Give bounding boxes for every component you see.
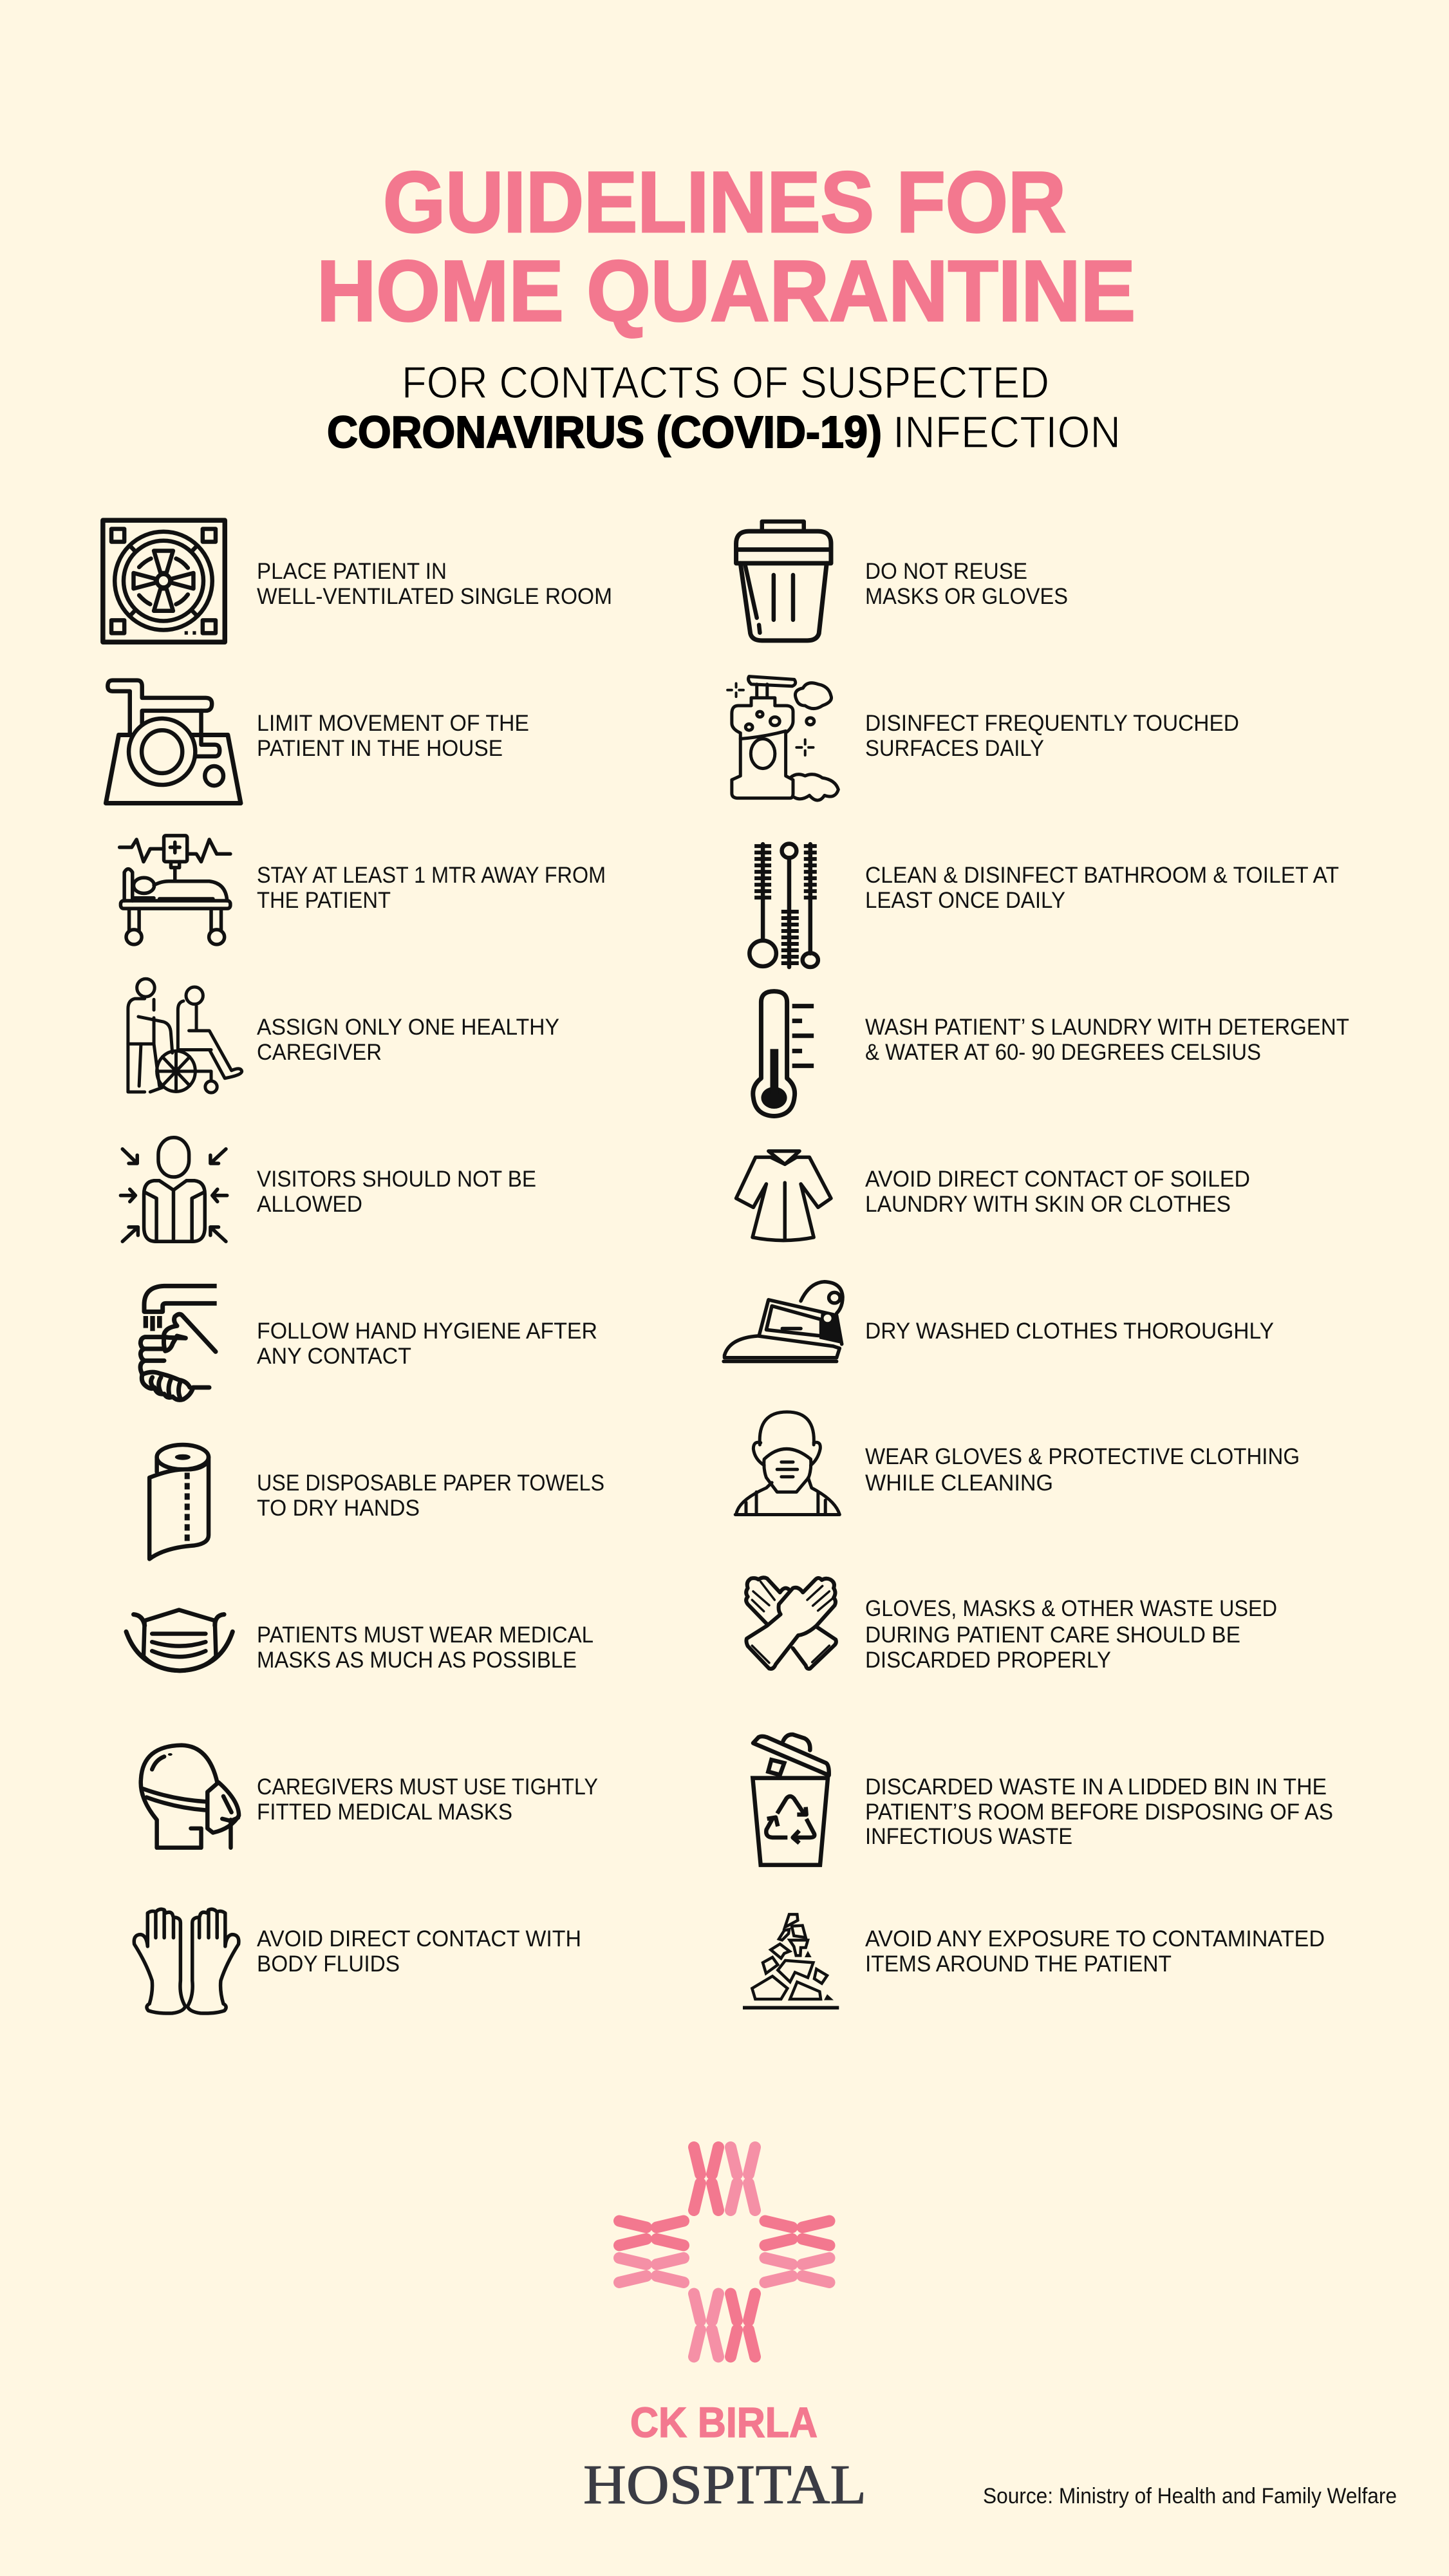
text: no visitors: ALLOWED — [257, 1192, 362, 1217]
text: one caregiver — [257, 1015, 559, 1065]
icon: head with fitted mask — [141, 1745, 239, 1848]
text: hand hygiene — [257, 1319, 597, 1369]
text: limit movement — [257, 711, 529, 761]
title: HOME QUARANTINE — [317, 243, 1136, 339]
text: lidded bin: PATIENT’S ROOM BEFORE DISPOSING OF AS — [865, 1800, 1333, 1825]
text: one caregiver: CAREGIVER — [257, 1040, 382, 1065]
icon: hand washing tap — [140, 1286, 217, 1400]
icon: paper towel roll — [149, 1445, 209, 1559]
text: lidded bin: INFECTIOUS WASTE — [865, 1824, 1072, 1849]
text: no visitors — [257, 1167, 536, 1217]
subtitle — [327, 357, 1121, 457]
icon: lidded recycling bin — [753, 1735, 829, 1865]
text: hand hygiene: FOLLOW HAND HYGIENE AFTER — [257, 1319, 597, 1344]
text: waste discarded — [865, 1596, 1277, 1673]
icon: person with mask — [735, 1412, 839, 1514]
text: paper towels: USE DISPOSABLE PAPER TOWELS — [257, 1471, 604, 1496]
text: protective clothing: WHILE CLEANING — [865, 1471, 1053, 1496]
logo: chromosome cross — [619, 2147, 829, 2356]
text: do not reuse: DO NOT REUSE — [865, 559, 1027, 584]
text: limit movement: PATIENT IN THE HOUSE — [257, 736, 503, 761]
logo text: CK Birla: CK BIRLA — [630, 2398, 818, 2446]
text: stay away: STAY AT LEAST 1 MTR AWAY FROM — [257, 863, 606, 888]
text: wash laundry — [865, 1015, 1349, 1065]
text: disinfect surfaces: SURFACES DAILY — [865, 736, 1044, 761]
text: clean bathroom: LEAST ONCE DAILY — [865, 888, 1065, 913]
text: waste discarded: DISCARDED PROPERLY — [865, 1648, 1111, 1673]
text: place patient: PLACE PATIENT IN — [257, 559, 447, 584]
text: caregiver masks: CAREGIVERS MUST USE TIGHTLY — [257, 1774, 598, 1800]
text: paper towels: TO DRY HANDS — [257, 1496, 420, 1521]
text: caregiver masks — [257, 1774, 598, 1825]
text: stay away — [257, 863, 606, 913]
text: body fluids — [257, 1926, 581, 1977]
text: paper towels — [257, 1471, 604, 1521]
text: soiled laundry: AVOID DIRECT CONTACT OF SOILED — [865, 1167, 1250, 1192]
text: body fluids: BODY FLUIDS — [257, 1951, 400, 1977]
text: body fluids: AVOID DIRECT CONTACT WITH — [257, 1926, 581, 1951]
text: place patient — [257, 559, 612, 609]
icon: pair of gloves — [134, 1909, 239, 2013]
text: contaminated items — [865, 1926, 1325, 1977]
text: no visitors: VISITORS SHOULD NOT BE — [257, 1167, 536, 1192]
panel: right column guidelines — [724, 522, 1349, 2007]
icon: crossed gloves — [746, 1577, 836, 1669]
icon: ventilation fan — [103, 520, 225, 642]
text: dry clothes: DRY WASHED CLOTHES THOROUGHLY — [865, 1319, 1274, 1344]
text: waste discarded: DURING PATIENT CARE SHOULD BE — [865, 1622, 1240, 1648]
text: do not reuse: MASKS OR GLOVES — [865, 584, 1068, 609]
title: GUIDELINES FOR — [383, 155, 1066, 250]
text: patient masks — [257, 1622, 594, 1673]
text: soiled laundry — [865, 1167, 1250, 1217]
text: one caregiver: ASSIGN ONLY ONE HEALTHY — [257, 1015, 559, 1040]
text: waste discarded: GLOVES, MASKS & OTHER WASTE USED — [865, 1596, 1277, 1621]
text: lidded bin: DISCARDED WASTE IN A LIDDED BIN IN THE — [865, 1774, 1327, 1800]
text: protective clothing: WEAR GLOVES & PROTECTIVE CLOTHING — [865, 1444, 1300, 1469]
text: patient masks: PATIENTS MUST WEAR MEDICAL — [257, 1622, 594, 1648]
text: hand hygiene: ANY CONTACT — [257, 1344, 411, 1369]
text: contaminated items: ITEMS AROUND THE PATIENT — [865, 1951, 1172, 1977]
text: soiled laundry: LAUNDRY WITH SKIN OR CLOTHES — [865, 1192, 1231, 1217]
subtitle: FOR CONTACTS OF SUSPECTED — [402, 357, 1049, 408]
source note: Source: Ministry of Health and Family Welfare — [983, 2484, 1397, 2508]
subtitle: CORONAVIRUS (COVID-19) — [327, 407, 882, 457]
icon: medical mask — [126, 1610, 232, 1671]
text: clean bathroom: CLEAN & DISINFECT BATHROOM & TOILET AT — [865, 863, 1339, 888]
subtitle: INFECTION — [893, 407, 1121, 457]
text: disinfect surfaces: DISINFECT FREQUENTLY TOUCHED — [865, 711, 1239, 736]
text: place patient: WELL-VENTILATED SINGLE ROOM — [257, 584, 612, 609]
icon: contaminated debris pile — [743, 1914, 839, 2007]
text: wash laundry: WASH PATIENT’ S LAUNDRY WITH DETERGENT — [865, 1015, 1349, 1040]
text: clean bathroom — [865, 863, 1339, 913]
icon: caregiver with wheelchair patient — [128, 979, 242, 1093]
logo text: Hospital: HOSPITAL — [583, 2453, 866, 2515]
icon: waste bin — [736, 522, 831, 641]
icon: thermometer — [753, 992, 814, 1116]
icon: hospital bed and monitor — [120, 836, 230, 945]
text: caregiver masks: FITTED MEDICAL MASKS — [257, 1800, 512, 1825]
icon: wheelchair on mat — [106, 681, 241, 804]
text: lidded bin — [865, 1774, 1333, 1849]
text: wash laundry: & WATER AT 60- 90 DEGREES CELSIUS — [865, 1040, 1261, 1065]
text: do not reuse — [865, 559, 1068, 609]
text: protective clothing — [865, 1444, 1300, 1496]
icon: soiled shirt — [736, 1151, 831, 1241]
icon: toilet brushes — [749, 844, 818, 967]
icon: visitor with inward arrows — [120, 1138, 227, 1241]
title — [317, 155, 1136, 339]
text: disinfect surfaces — [865, 711, 1239, 761]
icon: clothes iron — [724, 1282, 843, 1362]
text: stay away: THE PATIENT — [257, 888, 391, 913]
text: patient masks: MASKS AS MUCH AS POSSIBLE — [257, 1648, 577, 1673]
text: limit movement: LIMIT MOVEMENT OF THE — [257, 711, 529, 736]
panel: left column guidelines — [103, 520, 612, 2013]
text: contaminated items: AVOID ANY EXPOSURE TO CONTAMINATED — [865, 1926, 1325, 1951]
icon: disinfectant bottle and foam — [727, 677, 838, 800]
